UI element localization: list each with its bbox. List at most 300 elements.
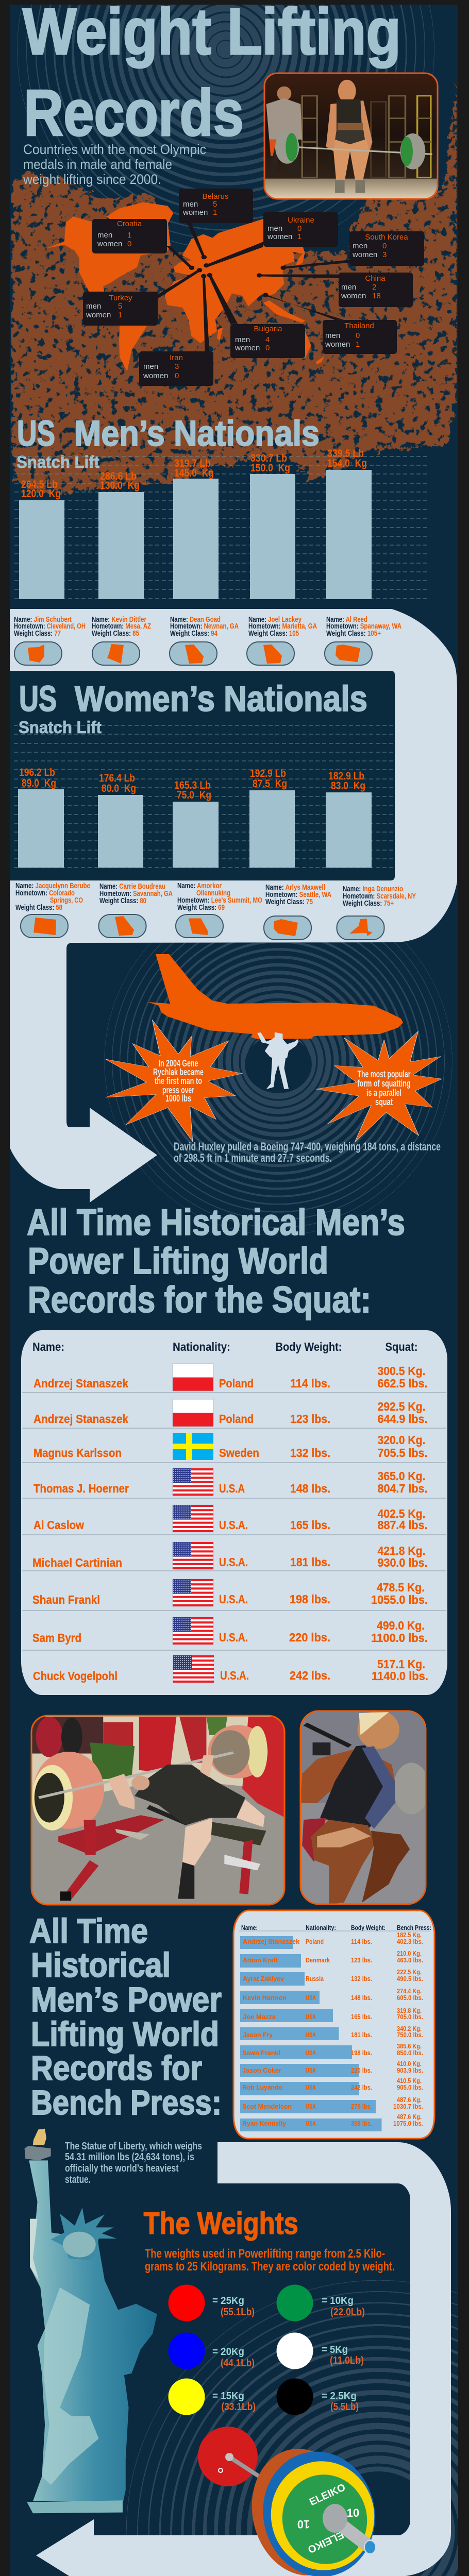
callout: Turkey: Turkey [109, 294, 132, 302]
legend: blue 20 kg: = 20Kg [212, 2346, 244, 2358]
row: Jason Coker: USA [306, 2067, 316, 2074]
row: Thomas J. Hoerner: U.S.A [219, 1482, 245, 1495]
legend: green 10 kg [276, 2284, 365, 2321]
row: Sawn Frankl: 198 lbs. [351, 2049, 372, 2057]
legend: black 2.5 kg: (5.5Lb) [330, 2401, 359, 2413]
statue fact text: statue. [65, 2174, 91, 2185]
photo: squatting bodybuilder [299, 1709, 429, 1906]
heading: The Weights: The Weights [144, 2206, 298, 2241]
row: Scot Mendelson: Scot Mendelson [242, 2103, 292, 2110]
heading: bench press records [29, 1912, 222, 2122]
legend: green 10 kg: = 10Kg [322, 2295, 354, 2307]
callout: Bulgaria [230, 324, 305, 358]
intro text [23, 142, 206, 187]
callout: Iran: women [143, 371, 168, 380]
row: Andrzej Stanaszek 114: 114 lbs. [290, 1377, 330, 1390]
legend: yellow 15 kg: = 15Kg [212, 2391, 244, 2402]
callout: Thailand: 0 [356, 331, 360, 340]
row: Chuck Vogelpohl: 1140.0 lbs. [372, 1669, 428, 1683]
row: Andrzej Stanaszek: 182.5 Kg. [397, 1931, 422, 1939]
callout: Turkey [83, 292, 158, 326]
legend: black 2.5 kg: = 2.5Kg [322, 2391, 357, 2402]
athlete: Dean Goad [170, 616, 239, 665]
bar chart: women's snatch lift: 75.0 Kg [177, 789, 211, 801]
athlete: Jacquelynn Berube: Weight Class: 58 [15, 904, 62, 912]
row: Ryan Kennelly: USA [306, 2120, 316, 2127]
row: Andrzej Stanaszek 123: Poland [219, 1412, 254, 1426]
legend: yellow 15 kg [168, 2378, 256, 2415]
row: Thomas J. Hoerner: Thomas J. Hoerner [34, 1482, 129, 1495]
row: Magnus Karlsson: 320.0 Kg. [377, 1433, 426, 1447]
heading: bench press records: All Time [29, 1912, 148, 1951]
row: Ryan Kennelly: 487.6 Kg. [397, 2113, 422, 2121]
athlete: Joel Lackey: Name: Joel Lackey [248, 616, 301, 624]
starburst callout: Gene Rychlak: Rychlak became [153, 1067, 204, 1077]
athlete: Carrie Boudreau: Hometown: Savannah, GA [99, 890, 173, 898]
table header: Body Weight: [351, 1924, 386, 1931]
row: Ryan Kennelly [240, 2113, 423, 2131]
subheading: Snatch Lift (men): Snatch Lift [16, 452, 99, 471]
athlete: Jim Schubert [14, 616, 86, 665]
row: Rob Luyando [240, 2077, 423, 2095]
row: Anton Kraft: 210.0 Kg. [397, 1950, 422, 1957]
row: Anton Kraft: Anton Kraft [243, 1957, 278, 1964]
weights description [145, 2247, 395, 2274]
row: Sawn Frankl: 850.0 lbs. [397, 2049, 423, 2057]
row: Michael Cartinian [32, 1542, 428, 1569]
callout: Turkey: men [86, 302, 101, 311]
row: Jason Fry: USA [306, 2031, 316, 2039]
row: Kevin Harmon: USA [306, 1994, 316, 2002]
row: Ayrat Zakiyev: 132 lbs. [351, 1975, 372, 1982]
athlete: Arlys Maxwell [264, 884, 331, 940]
text: David Huxley fact: of 298.5 ft in 1 minute and 27.7 seconds. [174, 1151, 332, 1164]
starburst callout: parallel squat [316, 1031, 442, 1142]
subheading: Snatch Lift (women): Snatch Lift [19, 718, 102, 737]
bar chart: men's snatch lift: 330.7 Lb [250, 452, 287, 464]
row: Sam Byrd: 1100.0 lbs. [371, 1631, 428, 1645]
icon: Eleiko barbell: 10 [347, 2506, 359, 2519]
athlete: Jim Schubert: Weight Class: 77 [14, 630, 61, 638]
row: Jason Coker [240, 2060, 423, 2077]
starburst callout: parallel squat: form of squatting [358, 1078, 410, 1089]
concentric ring pattern: title [10, 5, 458, 267]
heading: squat records: Records for the Squat: [28, 1280, 371, 1320]
bar chart: men's snatch lift: 319.7 Lb [174, 457, 211, 469]
callout: Bulgaria: men [235, 335, 250, 344]
athlete: Carrie Boudreau: Weight Class: 80 [99, 897, 146, 905]
athlete: Kevin Dittler: Weight Class: 85 [92, 630, 139, 638]
heading: squat records: Power Lifting World [28, 1241, 328, 1282]
athlete: Dean Goad: Hometown: Newnan, GA [170, 622, 239, 631]
athlete: Joel Lackey [247, 616, 317, 665]
table: bench press records [233, 1910, 434, 2139]
table header: Squat: [386, 1340, 417, 1353]
table header: Name: [32, 1340, 64, 1353]
row: Magnus Karlsson: 132 lbs. [290, 1446, 330, 1460]
row: Joe Mazza: 165 lbs. [351, 2013, 372, 2021]
athlete: Carrie Boudreau [99, 883, 173, 938]
heading: bench press records: Historical [31, 1946, 171, 1985]
athlete: Dean Goad: Weight Class: 94 [170, 630, 217, 638]
leader lines from countries [158, 223, 349, 351]
athlete: Carrie Boudreau: Name: Carrie Boudreau [99, 883, 165, 891]
row: Rob Luyando: USA [306, 2084, 316, 2091]
athlete: Jacquelynn Berube: Springs, CO [50, 896, 83, 905]
row: Sawn Frankl: Sawn Frankl [242, 2049, 280, 2057]
intro text: medals in male and female [23, 157, 172, 172]
callout: Croatia: 0 [127, 240, 131, 248]
callout: South Korea: South Korea [365, 233, 408, 242]
concentric ring pattern: plane section [10, 876, 458, 1247]
callout: Thailand [323, 320, 397, 354]
callout: South Korea: 3 [382, 250, 387, 259]
row: Jason Fry: 340.2 Kg. [397, 2025, 422, 2032]
callout: Thailand: men [325, 331, 340, 340]
row: Jason Coker: Jason Coker [242, 2067, 281, 2074]
row: Shaun Frankl: 198 lbs. [290, 1592, 330, 1606]
callout: South Korea [349, 231, 424, 266]
row: Chuck Vogelpohl: Chuck Vogelpohl [33, 1669, 118, 1683]
text: David Huxley fact [174, 1140, 441, 1164]
athlete: Dean Goad: Name: Dean Goad [170, 616, 221, 624]
dark circle behind figure [245, 1036, 312, 1093]
callout: Thailand: 1 [356, 340, 360, 349]
callout: Bulgaria: 4 [265, 335, 270, 344]
statue fact text [65, 2141, 202, 2185]
table header: Nationality: [306, 1924, 336, 1931]
row: Andrzej Stanaszek 114 [34, 1364, 428, 1391]
callout: Croatia: 1 [127, 231, 131, 240]
athlete: Arlys Maxwell: Name: Arlys Maxwell [265, 884, 325, 892]
row: Jason Coker: 903.9 lbs. [397, 2067, 423, 2074]
callout: Belarus: women [182, 208, 208, 217]
athlete: Amorkor Ollennuking: Ollennuking [196, 889, 230, 897]
row: Andrzej Stanaszek: 114 lbs. [351, 1938, 372, 1945]
bar chart: men's snatch lift: 154.0 Kg [327, 457, 367, 469]
icon: airplane silhouette [148, 954, 403, 1039]
row: Chuck Vogelpohl: 517.1 Kg. [377, 1657, 425, 1671]
row: Anton Kraft: Denmark [306, 1957, 330, 1964]
grunge vintage map texture [11, 82, 457, 495]
icon: man holding plane [257, 1032, 298, 1089]
row: Andrzej Stanaszek: Andrzej Stanaszek [243, 1938, 299, 1945]
bar chart: women's snatch lift: 176.4 Lb [99, 772, 135, 784]
row: Andrzej Stanaszek [240, 1931, 423, 1949]
starburst callout: Gene Rychlak: 1000 lbs [165, 1093, 191, 1104]
legend: red 25 kg: = 25Kg [212, 2295, 244, 2307]
legend: yellow 15 kg: (33.1Lb) [222, 2401, 256, 2413]
title: Records [24, 76, 244, 149]
callout: Iran [139, 351, 213, 386]
table header: Nationality: [173, 1340, 230, 1353]
row: Ayrat Zakiyev: 490.5 lbs. [397, 1975, 423, 1982]
row: Andrzej Stanaszek 123: 292.5 Kg. [377, 1400, 426, 1413]
athlete: Joel Lackey: Weight Class: 105 [248, 630, 299, 638]
row: Joe Mazza: 705.0 lbs. [397, 2013, 423, 2021]
row: Andrzej Stanaszek 123 [34, 1399, 428, 1427]
row: Kevin Harmon [240, 1988, 423, 2004]
title [23, 0, 401, 149]
athlete: Al Reed: Name: Al Reed [326, 616, 367, 624]
row: Michael Cartinian: 930.0 lbs. [377, 1556, 428, 1569]
legend: blue 20 kg: (44.1Lb) [221, 2358, 255, 2369]
row: Andrzej Stanaszek 123: 644.9 lbs. [377, 1412, 428, 1426]
row: Thomas J. Hoerner: 148 lbs. [290, 1482, 330, 1495]
row: Thomas J. Hoerner: 804.7 lbs. [377, 1482, 428, 1495]
callout: China: 18 [372, 292, 381, 300]
row: Anton Kraft [240, 1950, 423, 1968]
row: Magnus Karlsson: Sweden [219, 1446, 259, 1460]
concentric ring pattern: weights section [115, 2269, 458, 2576]
ribbon arrow: flow from men's to squat [10, 609, 457, 1202]
row: Shaun Frankl [32, 1579, 428, 1606]
athlete: Arlys Maxwell: Hometown: Seattle, WA [265, 891, 331, 899]
athlete: Amorkor Ollennuking [176, 882, 262, 938]
callout: Turkey: women [86, 311, 111, 319]
bar chart: men's snatch lift: 145.0 Kg [174, 467, 214, 479]
callout: Ukraine: women [267, 232, 292, 241]
row: Joe Mazza: 319.8 Kg. [397, 2007, 422, 2014]
row: Sam Byrd: 499.0 Kg. [377, 1619, 425, 1632]
legend: white 5 kg: = 5Kg [322, 2344, 348, 2355]
callout: China: men [341, 283, 356, 292]
bar chart: men's snatch lift: 264.5 Lb [21, 479, 58, 490]
athlete: Arlys Maxwell: Weight Class: 75 [265, 898, 313, 906]
row: Shaun Frankl: 478.5 Kg. [377, 1581, 425, 1594]
callout: Turkey: 5 [118, 302, 122, 311]
row: Sawn Frankl: USA [306, 2049, 316, 2057]
row: Chuck Vogelpohl [33, 1655, 428, 1683]
icon: Eleiko barbell: 10 [297, 2518, 310, 2531]
callout: Croatia: men [97, 231, 112, 240]
bar chart: men's snatch lift [14, 448, 427, 599]
row: Scot Mendelson: 275 lbs. [351, 2103, 372, 2110]
callout: Ukraine [263, 212, 338, 247]
row: Al Caslow: Al Caslow [34, 1518, 84, 1532]
callout: South Korea: 0 [382, 242, 387, 250]
row: Jason Fry: Jason Fry [243, 2031, 273, 2039]
row: Andrzej Stanaszek 114: 300.5 Kg. [377, 1364, 426, 1378]
row: Scot Mendelson: 487.6 Kg. [397, 2096, 422, 2104]
athlete: Jim Schubert: Hometown: Cleveland, OH [14, 622, 86, 631]
row: Joe Mazza [240, 2007, 423, 2022]
bar chart: men's snatch lift: 150.0 Kg [250, 462, 290, 474]
heading: US Women's Nationals: Women’s Nationals [75, 679, 367, 719]
row: Michael Cartinian: U.S.A. [219, 1555, 248, 1569]
callout: South Korea: men [353, 242, 367, 250]
starburst callout: parallel squat: is a parallel [366, 1088, 401, 1098]
statue fact text: The Statue of Liberty, which weighs [65, 2141, 202, 2152]
callout: China [339, 273, 413, 307]
row: Joe Mazza: Joe Mazza [243, 2013, 276, 2021]
legend: black 2.5 kg [276, 2378, 359, 2415]
callout: Thailand: women [325, 340, 350, 349]
table header: Body Weight: [275, 1340, 342, 1353]
callout: Croatia: Croatia [117, 219, 142, 228]
starburst callout: Gene Rychlak: press over [162, 1085, 194, 1095]
heading: squat records [27, 1202, 405, 1320]
heading: bench press records: Bench Press: [31, 2083, 222, 2122]
weights description: grams to 25 Kilograms. They are color coded by weight. [145, 2260, 395, 2274]
bar chart: women's snatch lift: 196.2 Lb [19, 767, 55, 778]
bar chart: women's snatch lift: 192.9 Lb [250, 768, 286, 779]
row: Andrzej Stanaszek 114: Poland [219, 1377, 254, 1390]
athlete: Inga Denunzio: Hometown: Scarsdale, NY [343, 892, 416, 901]
row: Magnus Karlsson [34, 1433, 428, 1460]
row: Andrzej Stanaszek 114: 662.5 lbs. [377, 1377, 428, 1390]
bar chart: women's snatch lift: 182.9 Lb [328, 770, 364, 782]
row: Sam Byrd: U.S.A. [219, 1631, 248, 1644]
athlete: Jacquelynn Berube: Hometown: Colorado [15, 889, 75, 897]
row: Sawn Frankl: 385.6 Kg. [397, 2043, 422, 2050]
row: Sam Byrd: Sam Byrd [32, 1631, 81, 1645]
table header: Name: [241, 1924, 258, 1931]
athlete: Al Reed: Hometown: Spanaway, WA [326, 622, 401, 631]
callout: Turkey: 1 [118, 311, 122, 319]
row: Anton Kraft: 463.0 lbs. [397, 1957, 423, 1964]
panel: women's nationals [10, 671, 395, 880]
row: Shaun Frankl: U.S.A. [219, 1592, 248, 1606]
row: Joe Mazza: USA [306, 2013, 316, 2021]
callout: Croatia: women [97, 240, 122, 248]
callout: Belarus: 5 [213, 200, 217, 209]
heading: squat records: All Time Historical Men’s [27, 1202, 405, 1243]
callout: Ukraine: 1 [297, 232, 301, 241]
legend: red 25 kg: (55.1Lb) [221, 2307, 255, 2318]
callout: Croatia [92, 219, 167, 253]
row: Chuck Vogelpohl: U.S.A. [220, 1669, 249, 1682]
legend: white 5 kg: (11.0Lb) [330, 2355, 364, 2366]
row: Rob Luyando: 905.0 lbs. [397, 2084, 423, 2091]
callout: China: 2 [372, 283, 376, 292]
row: Shaun Frankl: Shaun Frankl [32, 1593, 100, 1606]
athlete: Inga Denunzio [337, 885, 416, 940]
bar chart: women's snatch lift: 80.0 Kg [102, 783, 136, 794]
callout: Ukraine: men [267, 224, 282, 233]
bar chart: women's snatch lift: 89.0 Kg [22, 777, 56, 789]
legend: green 10 kg: (22.0Lb) [330, 2307, 365, 2318]
row: Ryan Kennelly: 308 lbs. [351, 2120, 372, 2127]
table header: Bench Press: [397, 1924, 431, 1931]
athlete: Kevin Dittler [92, 616, 151, 665]
bar chart: men's snatch lift: 120.0 Kg [21, 488, 61, 500]
row: Rob Luyando: 242 lbs. [351, 2084, 372, 2091]
athlete: Al Reed: Weight Class: 105+ [326, 630, 381, 638]
ribbon arrow: flow to sources [36, 2142, 451, 2576]
starburst callout: Gene Rychlak: In 2004 Gene [159, 1058, 198, 1069]
row: Michael Cartinian: 421.8 Kg. [377, 1544, 426, 1557]
athlete: Inga Denunzio: Weight Class: 75+ [343, 900, 394, 908]
row: Ayrat Zakiyev: Ayrat Zakiyev [243, 1975, 284, 1982]
callout: China: women [341, 292, 366, 300]
row: Al Caslow: 165 lbs. [290, 1518, 330, 1532]
callout: Iran: men [143, 362, 158, 371]
statue fact text: 54.31 million lbs (24,634 tons), is [65, 2151, 194, 2163]
heading: bench press records: Records for [31, 2049, 202, 2088]
row: Andrzej Stanaszek: 402.3 lbs. [397, 1938, 423, 1945]
callout: China: China [365, 274, 386, 283]
row: Kevin Harmon: 148 lbs. [351, 1994, 372, 2002]
intro text: Countries with the most Olympic [23, 142, 206, 157]
row: Ryan Kennelly: 1075.0 lbs. [393, 2120, 423, 2127]
women's athlete cards [15, 882, 416, 940]
row: Al Caslow: 402.5 Kg. [377, 1507, 426, 1520]
bar chart: men's snatch lift: 286.6 Lb [100, 470, 137, 482]
row: Rob Luyando: Rob Luyando [242, 2084, 282, 2091]
row: Ayrat Zakiyev: 222.5 Kg. [397, 1969, 422, 1976]
starburst callout: parallel squat: squat [375, 1097, 393, 1107]
row: Ayrat Zakiyev: Russia [306, 1975, 324, 1982]
callout: Belarus [179, 189, 253, 223]
heading: bench press records: Lifting World [31, 2015, 219, 2054]
callout: Belarus: Belarus [203, 192, 228, 201]
row: Ayrat Zakiyev [240, 1969, 423, 1986]
callout: Iran: 0 [175, 371, 179, 380]
icon: Eleiko barbell: ELEIKO [308, 2482, 347, 2508]
row: Magnus Karlsson: 705.5 lbs. [377, 1446, 428, 1460]
legend: blue 20 kg [168, 2333, 255, 2369]
athlete: Inga Denunzio: Name: Inga Denunzio [343, 885, 403, 893]
athlete: Jim Schubert: Name: Jim Schubert [14, 616, 72, 624]
heading: US Men's Nationals: US [17, 413, 55, 453]
row: Jason Fry [240, 2025, 423, 2040]
weights description: The weights used in Powerlifting range from 2.5 Kilo- [145, 2247, 385, 2261]
row: Sam Byrd: 220 lbs. [289, 1631, 330, 1644]
row: Chuck Vogelpohl: 242 lbs. [290, 1669, 330, 1682]
world map [46, 202, 325, 371]
row: Andrzej Stanaszek 114: Andrzej Stanaszek [34, 1377, 128, 1390]
legend: white 5 kg [276, 2333, 364, 2369]
row: Jason Coker: 410.0 Kg. [397, 2060, 422, 2067]
starburst callout: Gene Rychlak [106, 1020, 242, 1142]
bar chart: men's snatch lift: 130.0 Kg [100, 480, 140, 492]
callout: Bulgaria: women [234, 344, 260, 352]
starburst callout: parallel squat: The most popular [358, 1069, 410, 1079]
row: Scot Mendelson: 1030.7 lbs. [393, 2103, 423, 2110]
athlete: Amorkor Ollennuking: Hometown: Lee's Summit, MO [177, 896, 262, 905]
callout: Belarus: 1 [213, 208, 217, 217]
athlete: Jacquelynn Berube: Name: Jacquelynn Berube [15, 882, 90, 890]
athlete: Amorkor Ollennuking: Name: Amorkor [177, 882, 222, 890]
row: Shaun Frankl: 1055.0 lbs. [371, 1593, 428, 1606]
row: Thomas J. Hoerner: 365.0 Kg. [377, 1469, 426, 1483]
row: Jason Coker: 220 lbs. [351, 2067, 372, 2074]
callout: Thailand: Thailand [344, 321, 374, 330]
bar chart: women's snatch lift [14, 725, 393, 868]
row: Anton Kraft: 123 lbs. [351, 1957, 372, 1964]
statue fact text: officially the world’s heaviest [65, 2163, 179, 2174]
callout: Bulgaria: Bulgaria [254, 325, 282, 333]
row: Scot Mendelson [240, 2096, 423, 2113]
callout: Bulgaria: 0 [265, 344, 270, 352]
row: Andrzej Stanaszek 123: Andrzej Stanaszek [34, 1412, 128, 1426]
row: Thomas J. Hoerner [34, 1468, 428, 1496]
men's athlete cards [14, 616, 401, 665]
row: Al Caslow: 887.4 lbs. [377, 1518, 428, 1532]
icon: Eleiko barbell [198, 2427, 387, 2576]
icon: Statue of Liberty [25, 2129, 157, 2513]
photo: deadlift on stage [263, 71, 440, 200]
athlete: Al Reed [325, 616, 401, 665]
legend: red 25 kg [168, 2284, 255, 2321]
legend: weight color codes [168, 2284, 365, 2415]
row: Jason Fry: 750.0 lbs. [397, 2031, 423, 2039]
callout: South Korea: women [352, 250, 377, 259]
starburst callout: Gene Rychlak: the first man to [155, 1076, 202, 1086]
row: Magnus Karlsson: Magnus Karlsson [34, 1446, 122, 1460]
callout: Iran: Iran [170, 353, 183, 362]
